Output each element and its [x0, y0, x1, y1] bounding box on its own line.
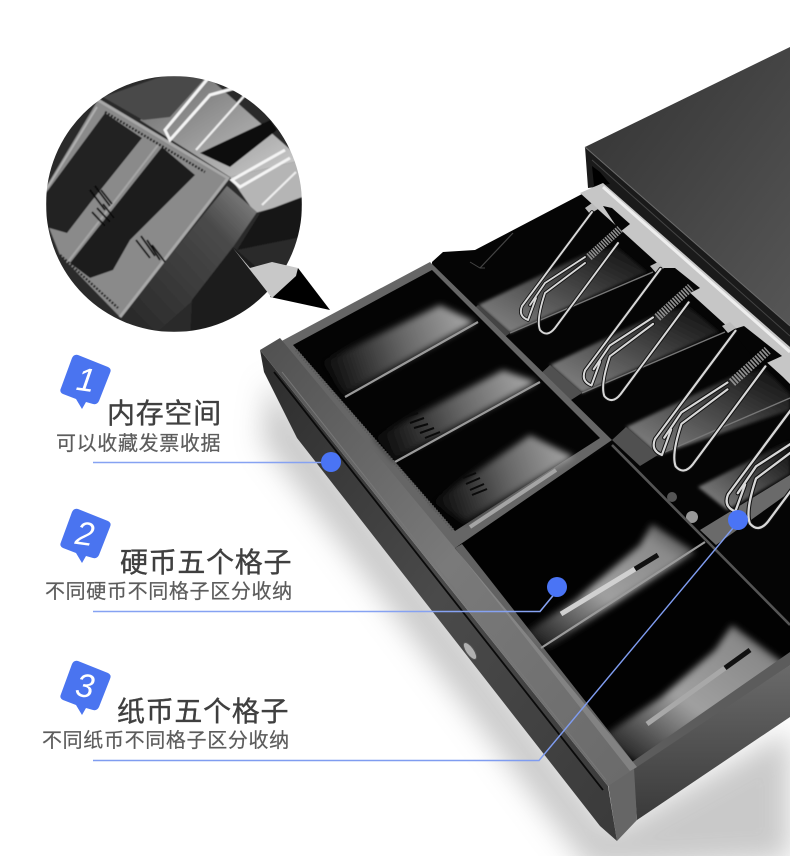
callout 2: coins [45, 509, 567, 612]
drawer shadow [262, 380, 790, 856]
bill clip 3 [654, 331, 768, 471]
badge 3 [60, 661, 111, 715]
badge 2 [60, 509, 111, 563]
silver tab in magnifier [233, 248, 298, 298]
heading 2: 硬币五个格子 [120, 547, 292, 578]
silver rail [580, 183, 790, 384]
organizer tray [276, 262, 612, 548]
pointer [270, 268, 330, 310]
subtext 1: 可以收藏发票收据 [56, 432, 221, 455]
badge 1: 1 [74, 360, 98, 399]
dot 3 [728, 510, 748, 530]
screws [667, 492, 698, 523]
leader line 1 [93, 462, 330, 464]
callout 1: storage [56, 355, 341, 472]
dot 2 [547, 577, 567, 597]
badge 2: 2 [72, 514, 97, 553]
bill clip 1 [521, 212, 620, 334]
heading 1: 内存空间 [107, 398, 222, 429]
drawer front panel [260, 338, 637, 841]
callout 3: bills [42, 510, 748, 760]
badge 3: 3 [73, 666, 97, 705]
vent slits [405, 413, 487, 495]
magnifier circle [46, 76, 330, 340]
badge 1 [60, 355, 111, 409]
subtext 3: 不同纸币不同格子区分收纳 [42, 729, 290, 752]
leader line 3 [93, 522, 738, 760]
bill clip 2 [584, 269, 691, 400]
cabinet lid [585, 47, 790, 352]
subtext 2: 不同硬币不同格子区分收纳 [45, 580, 293, 603]
coin and bill compartments [440, 445, 790, 784]
heading 3: 纸币五个格子 [117, 696, 289, 727]
bill clip 4 [727, 380, 790, 528]
cash drawer photo [260, 47, 790, 841]
organizer floors [322, 305, 574, 522]
leader line 2 [93, 592, 556, 612]
bill clip bay floors [466, 233, 790, 545]
coin and bill bay base [432, 194, 790, 770]
lock [461, 641, 479, 661]
dot 1 [321, 452, 341, 472]
drawer right wall [608, 652, 790, 841]
